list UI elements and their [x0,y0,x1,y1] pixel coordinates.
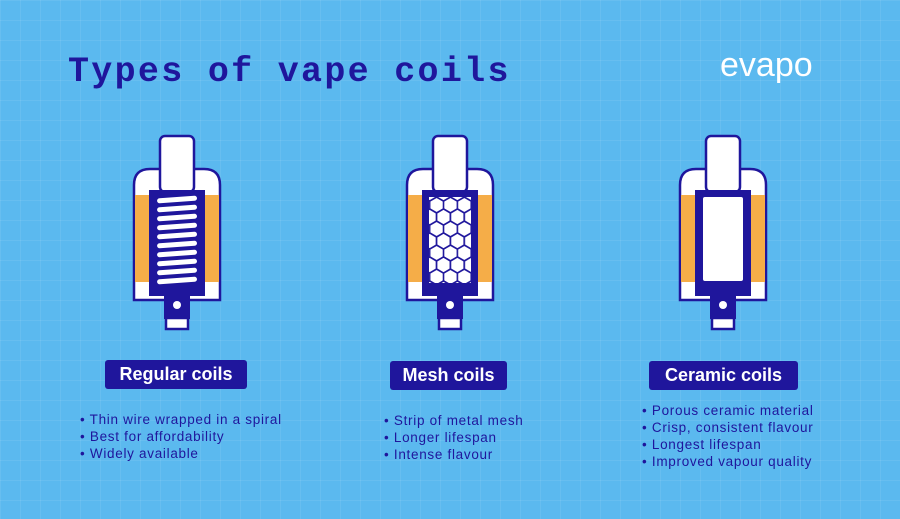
list: mesh: Intense flavour [394,447,493,462]
coil: mesh [407,136,493,329]
title: Types of vape coils [68,52,511,92]
list: ceramic: Improved vapour quality [652,454,812,469]
list: ceramic: Crisp, consistent flavour [652,420,813,435]
label: mesh [390,361,507,390]
list: regular: Widely available [90,446,199,461]
list: ceramic [642,403,814,469]
list: ceramic: Porous ceramic material [652,403,814,418]
list: mesh: Longer lifespan [394,430,497,445]
label: ceramic: Ceramic coils [665,365,782,385]
label: regular [105,360,247,389]
logo: evapo [720,46,813,84]
list: regular: Thin wire wrapped in a spiral [90,412,282,427]
label: ceramic [649,361,798,390]
label: regular: Regular coils [119,364,233,384]
coil: regular [134,136,220,329]
list: mesh: Strip of metal mesh [394,413,523,428]
list: regular: Best for affordability [90,429,224,444]
list: mesh [384,413,523,462]
list: ceramic: Longest lifespan [652,437,761,452]
list: regular [80,412,282,461]
coil: ceramic [680,136,766,329]
label: mesh: Mesh coils [402,365,495,385]
